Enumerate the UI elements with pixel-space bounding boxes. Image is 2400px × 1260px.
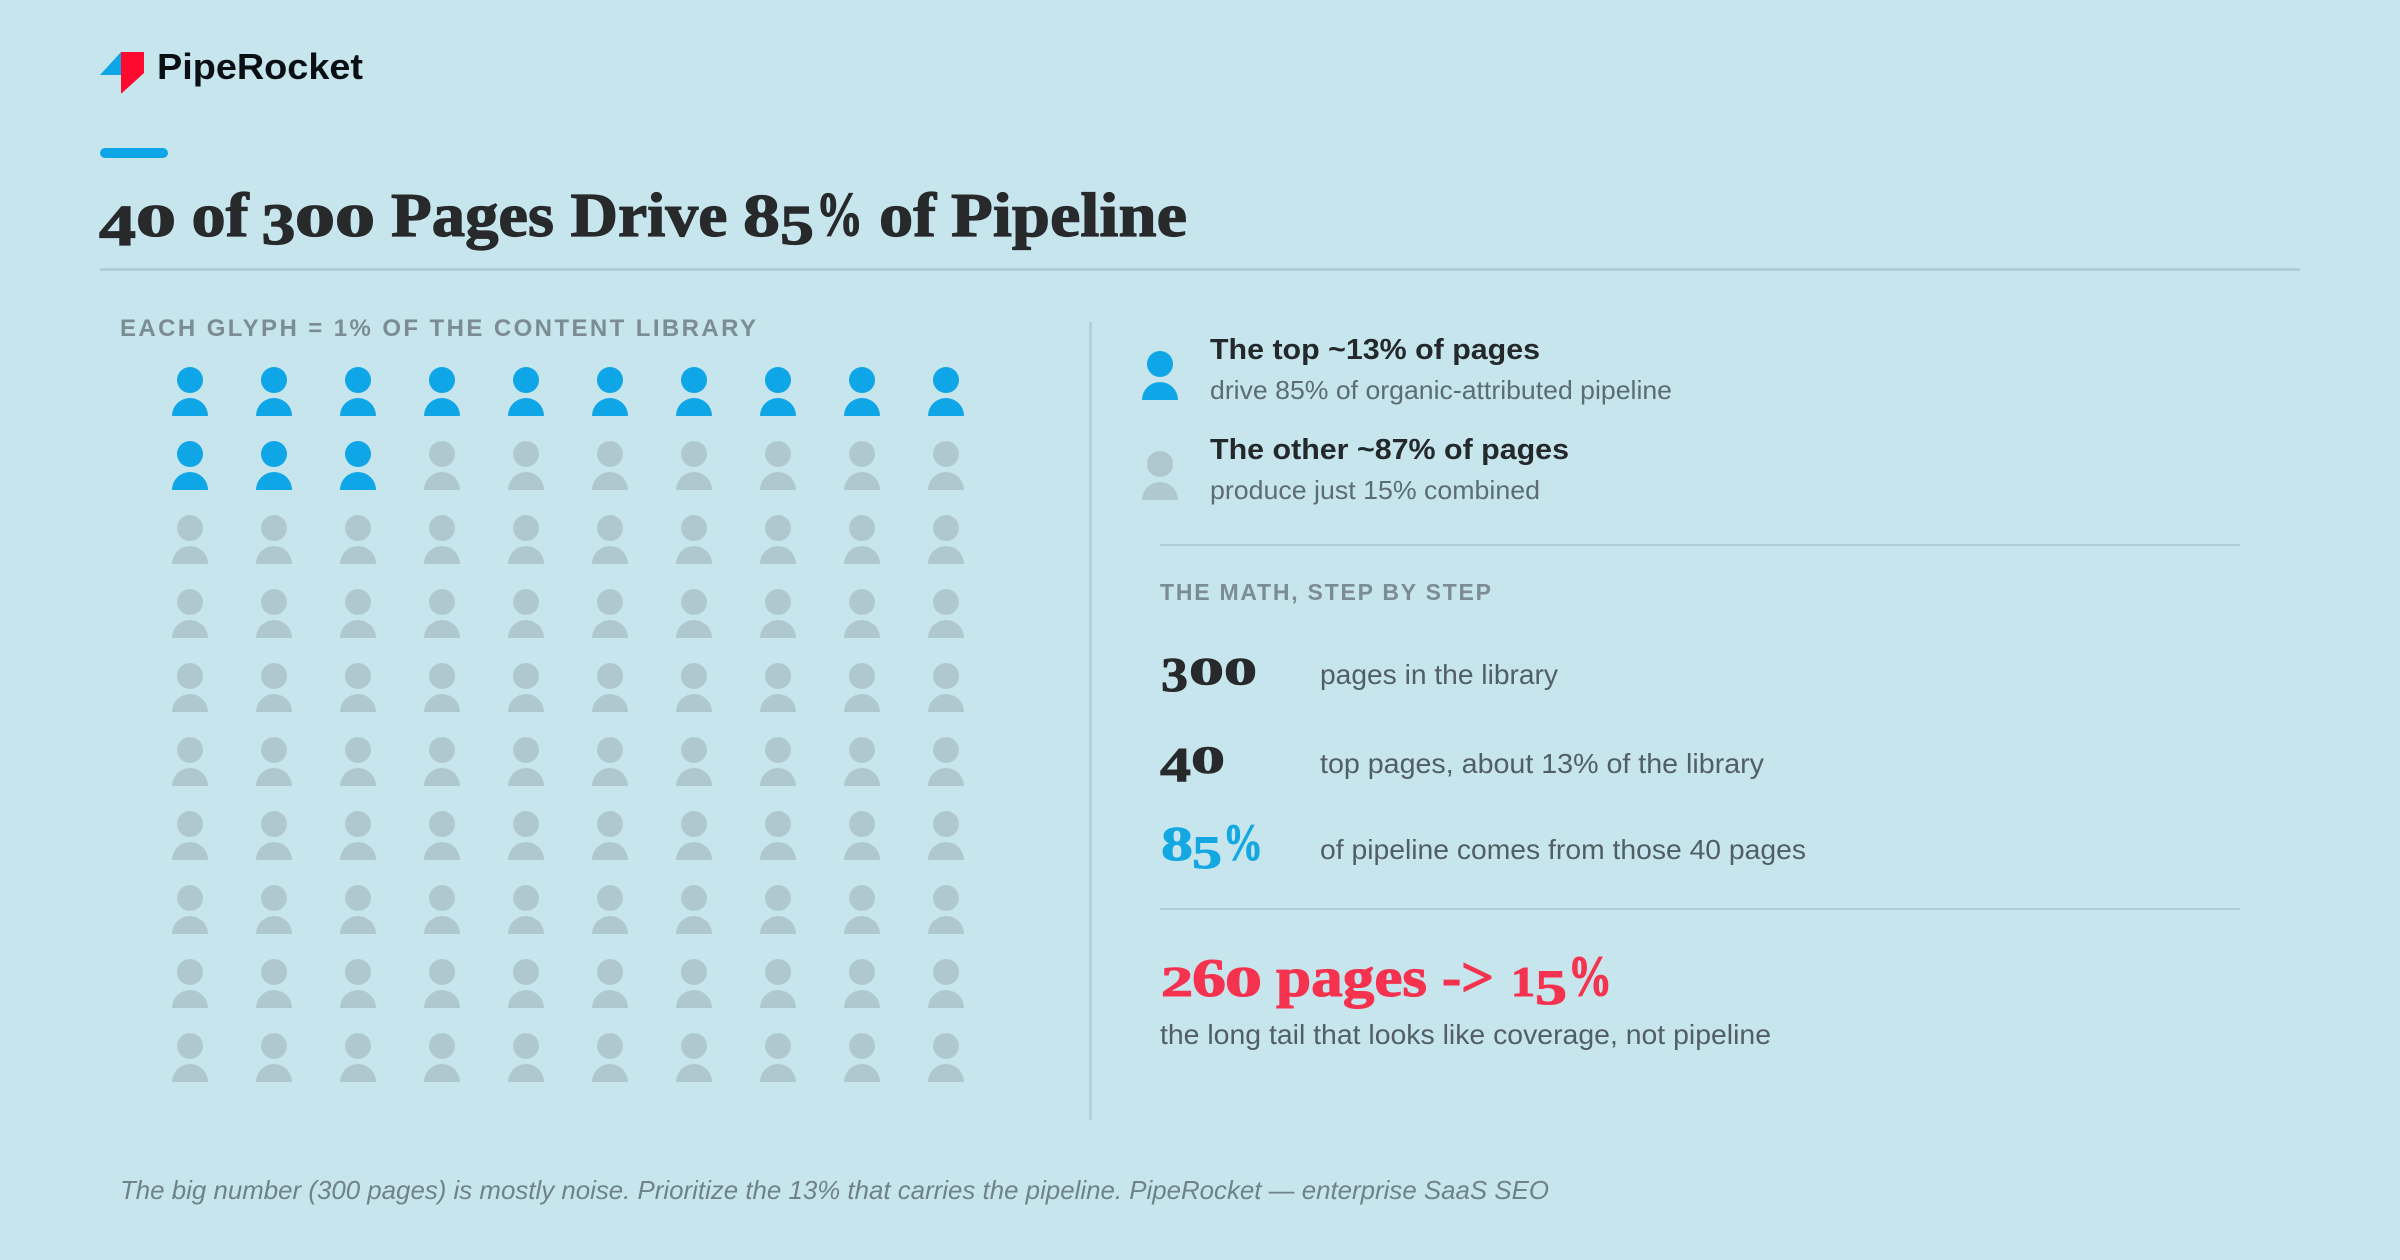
text: of pipeline: of pipeline comes from those 40 pages (1320, 834, 1806, 865)
math heading: THE MATH, STEP BY STEP (1160, 579, 1491, 605)
icon: blue person (1142, 351, 1178, 400)
number: 85%: 8 (1161, 816, 1193, 871)
wordmark: PipeRocket (157, 46, 363, 87)
math row: 300 (1161, 647, 1558, 702)
title: 5 (780, 195, 814, 257)
callout headline: 5 (1535, 959, 1567, 1015)
title: of (879, 182, 937, 250)
callout headline: % (1568, 945, 1612, 1008)
title: Pipeline (951, 182, 1187, 250)
number: 300: 0 (1224, 650, 1257, 694)
panel: the math (1160, 579, 1806, 879)
math row: 40 (1160, 737, 1764, 792)
title: 0 (295, 195, 335, 246)
number: 85%: 5 (1192, 827, 1222, 879)
callout note: the long tail that looks like coverage, not pipeline (1160, 1019, 1771, 1050)
callout: long tail (1160, 945, 1771, 1050)
callout headline: -> (1442, 947, 1494, 1009)
logo: PipeRocket (100, 46, 363, 93)
icon: rocket mark (100, 52, 144, 93)
title: 8 (743, 183, 780, 249)
legend note: other pages: produce just 15% combined (1210, 475, 1540, 505)
footer note: The big number (300 pages) is mostly noise. Prioritize the 13% that carries the pipeline. PipeRocket — enterprise SaaS SEO (120, 1175, 1549, 1205)
legend title: other pages: The other ~87% of pages (1210, 434, 1569, 466)
text: pages in the library: pages in the library (1320, 659, 1558, 690)
panel: legend (1142, 334, 1672, 505)
number: 40: 4 (1160, 737, 1191, 792)
title: 4 (99, 193, 136, 258)
chart heading: EACH GLYPH = 1% OF THE CONTENT LIBRARY (120, 315, 756, 342)
number: 300: 3 (1161, 647, 1188, 702)
title: Pages (391, 182, 554, 250)
callout headline: 6 (1192, 948, 1226, 1008)
icon: grey person (1142, 451, 1178, 500)
accent bar (100, 148, 168, 158)
title: 0 (136, 195, 176, 246)
title: % (816, 181, 863, 249)
number: 85%: % (1223, 815, 1263, 872)
text: top pages: top pages, about 13% of the library (1320, 748, 1764, 779)
callout headline: 0 (1225, 960, 1262, 1006)
legend note: top pages: drive 85% of organic-attributed pipeline (1210, 375, 1672, 405)
legend item: other pages (1142, 434, 1569, 505)
callout headline: pages (1276, 947, 1427, 1009)
pictogram grid: 13 highlighted of 100 (172, 367, 964, 1082)
callout headline: 2 (1161, 960, 1193, 1006)
title: of (192, 182, 250, 250)
panel: glyph chart (120, 315, 964, 1082)
title: 0 (335, 195, 375, 246)
legend item: top pages (1142, 334, 1672, 405)
number: 40: 0 (1191, 739, 1225, 782)
title: 3 (262, 192, 296, 257)
callout headline: 1 (1511, 960, 1535, 1006)
number: 300: 0 (1189, 650, 1224, 694)
title: Drive (570, 182, 728, 250)
legend title: top pages: The top ~13% of pages (1210, 334, 1540, 366)
math row: 85% (1161, 815, 1806, 879)
